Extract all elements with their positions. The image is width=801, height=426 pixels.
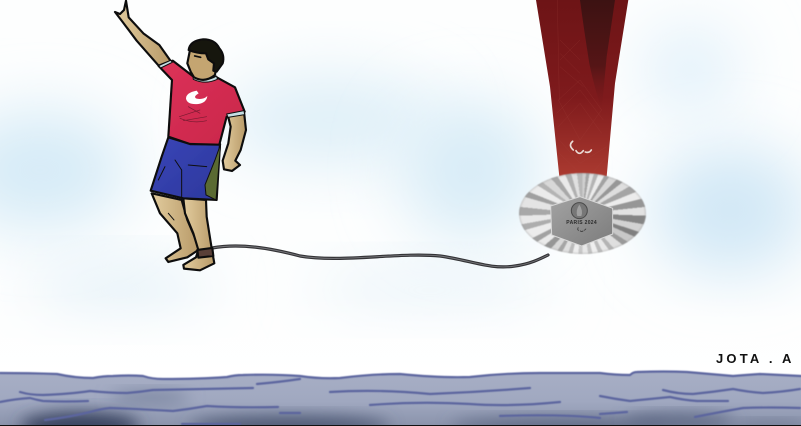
hanging arm xyxy=(223,112,246,171)
shorts stripe xyxy=(205,144,221,200)
shirt xyxy=(159,61,245,145)
sleeve cuffs and collar xyxy=(159,60,245,117)
hexagon plate xyxy=(551,197,613,246)
front leg and foot xyxy=(183,198,214,270)
back leg xyxy=(152,193,198,262)
wave lines xyxy=(0,372,801,424)
medal agitos xyxy=(578,227,586,232)
raised arm and hand xyxy=(115,1,171,66)
hair xyxy=(189,39,223,72)
icon: ribbon agitos xyxy=(570,141,591,153)
ribbon pattern xyxy=(557,0,607,172)
athlete xyxy=(115,1,246,270)
medal text: PARIS 2024 xyxy=(566,220,597,226)
sea xyxy=(0,365,801,426)
signature: JOTA . A xyxy=(716,351,795,366)
clothing folds xyxy=(158,160,207,220)
rope xyxy=(212,246,548,267)
emblem xyxy=(571,203,587,219)
ankle strap xyxy=(197,248,213,258)
shirt logo xyxy=(179,91,207,122)
medal disc xyxy=(519,173,646,254)
ribbon xyxy=(536,0,628,177)
eye xyxy=(195,56,201,57)
neck and face xyxy=(187,48,217,80)
shorts xyxy=(151,137,220,200)
medal centre xyxy=(550,196,614,246)
ribbon fold xyxy=(580,0,615,110)
